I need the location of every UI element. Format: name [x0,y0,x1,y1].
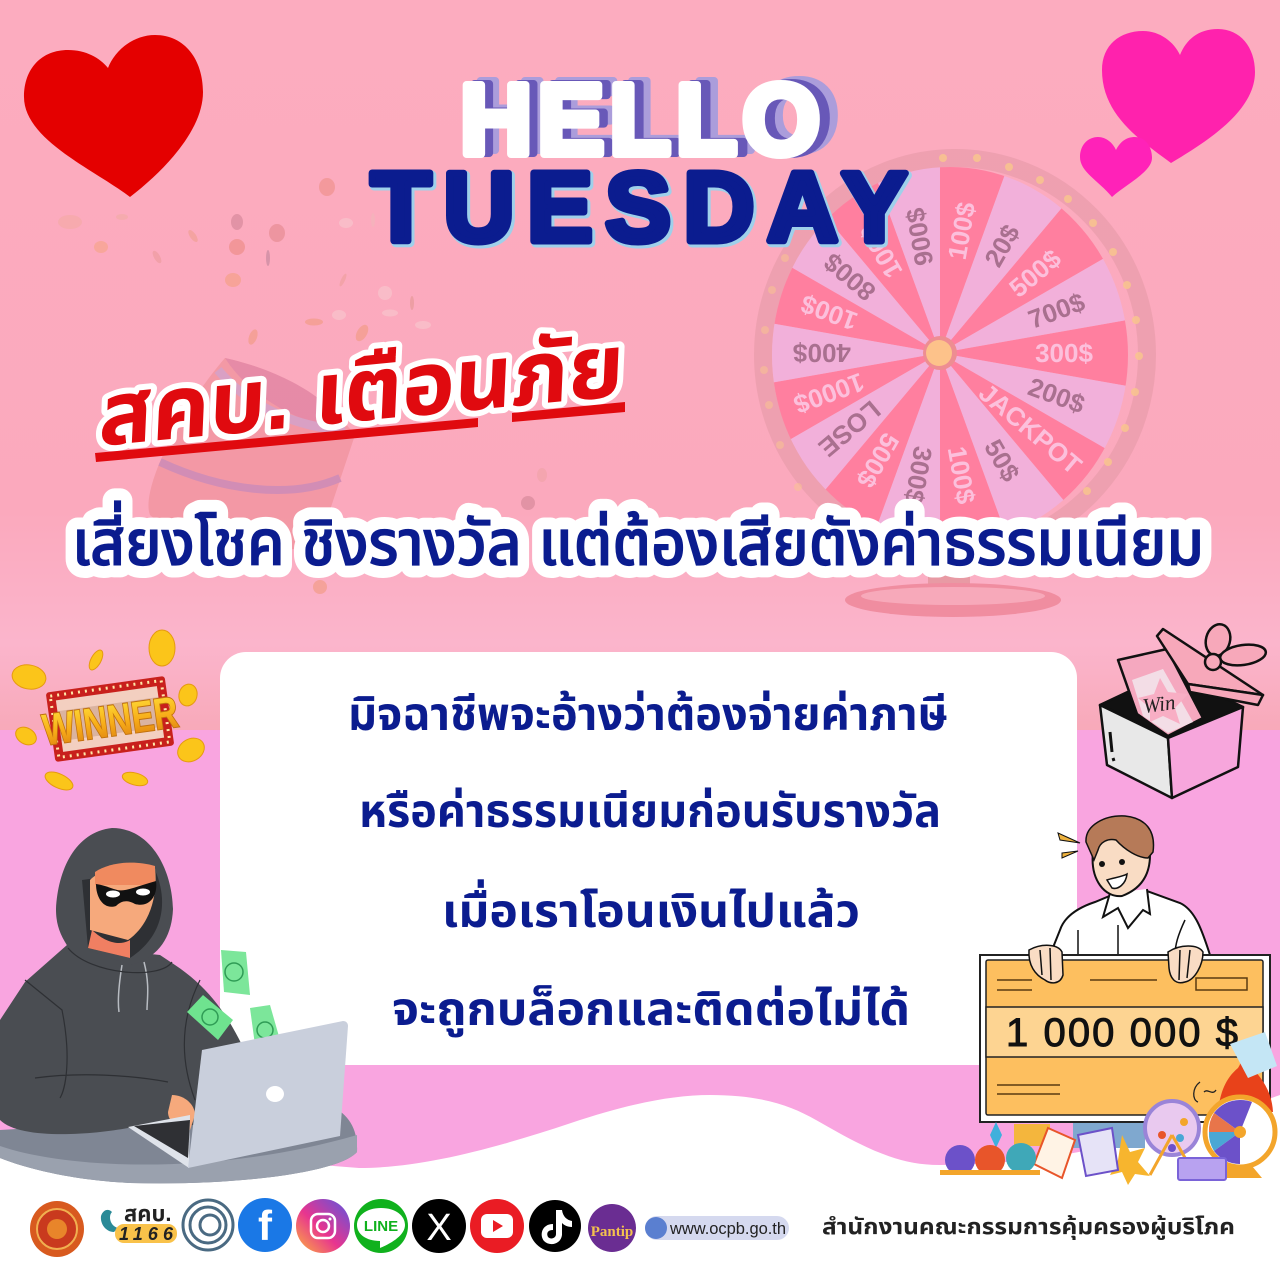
icon: gift box with phone [1100,621,1267,798]
head [1093,835,1150,896]
title: HELLO: HELLO [474,60,838,172]
bingo balls [945,1145,975,1175]
eyes [1099,861,1105,867]
icon: LINE [354,1199,408,1253]
wheel segments: 50$ [978,434,1026,487]
footer: social icons row [30,1198,789,1257]
wheel segments: 100$ [942,199,981,262]
bow [1202,621,1267,670]
icon: TikTok [529,1200,581,1252]
subheading: เสี่ยงโชค ชิงรางวัล แต่ต้องเสียตังค่าธรรมเนียม [72,500,1204,579]
icon: Facebook: f [258,1202,273,1249]
heading underline [95,402,625,462]
ticket red [1034,1128,1075,1178]
title: HELLO: HELLO [460,64,820,176]
title: TUESDAY: TUESDAY [371,152,907,262]
icon: small magenta heart [1080,137,1152,197]
wheel segments: 400$ [793,338,851,368]
lottery cage [1145,1101,1199,1175]
wheel segments: 300$ [1035,338,1093,368]
sign frame [38,675,182,763]
wheel segments: 300$ [899,444,938,507]
face [90,866,156,940]
hoodie fold lines [25,948,200,1100]
phone [1118,649,1203,736]
title: TUESDAY: TUESDAY [373,154,909,264]
smile [1107,874,1127,888]
logo: hotline 1166 [101,1201,177,1244]
burst [1110,1135,1150,1185]
falling money 2 [250,1005,280,1045]
hood [56,828,173,965]
sign frame: WINNER [40,688,181,755]
icon: YouTube [470,1199,524,1253]
cheque [980,955,1270,1122]
money bag [1218,1052,1273,1112]
coin stack [1014,1124,1050,1146]
logo: hotline 1166: 1166 [119,1224,174,1244]
illustration: lottery items [940,1032,1277,1185]
man legs [1073,1120,1145,1148]
text: line 2: หรือค่าธรรมเนียมก่อนรับรางวัล [359,785,941,837]
icon: Instagram [296,1199,350,1253]
icon: Pantip [588,1204,636,1252]
background: white wave footer area [0,1095,1280,1280]
hand [168,1095,195,1130]
text: line 1: มิจฉาชีพจะอ้างว่าต้องจ่ายค่าภาษี [348,688,948,740]
background coins [58,178,547,594]
neck shading [88,930,130,958]
hair [82,870,162,958]
box right face [1168,707,1243,798]
logo: hotline 1166: สคบ. [124,1201,172,1226]
background: prize wheel [710,121,1170,617]
icon: X [412,1199,466,1253]
background: orchid lower zone [0,730,1280,1170]
laptop screen [188,1021,348,1168]
gold coins [10,630,209,794]
wheel segments: 500$ [850,428,905,493]
icon: gift box with phone: Win [1141,690,1177,718]
wheel segments [772,167,1128,524]
text: line 3: เมื่อเราโอนเงินไปแล้ว [442,879,860,937]
wheel segments: JACKPOT [973,377,1088,480]
heading: OCPB warns: สคบ. เตือนภัย [97,315,626,465]
background: pink upper zone [0,0,1280,732]
website pill [645,1216,789,1240]
box left face [1100,705,1172,798]
purple banknote [1178,1158,1226,1180]
wheel rim [763,158,1147,552]
icon: winner sign with coins [10,630,209,794]
cheque signature [1194,1082,1216,1102]
wheel segments: 800$ [817,247,881,307]
falling money 1 [221,950,250,995]
sparkle [990,1122,1002,1148]
laptop keyboard base [128,1115,190,1168]
exclamation mark [1110,732,1114,761]
drawstrings [118,962,148,1012]
wheel segments: 100$ [796,288,861,337]
cheque lines [997,980,1157,1094]
wheel segments: LOSE [813,395,886,463]
hoodie body [0,945,242,1134]
icon: LINE: LINE [364,1218,398,1235]
title: HELLO: HELLO [468,63,830,175]
icon: X: X [426,1207,452,1249]
laptop logo [266,1086,284,1102]
footer: agency name: สำนักงานคณะกรรมการคุ้มครองผู้บริโภค [822,1214,1235,1240]
ticket purple [1078,1128,1118,1176]
hair [1086,816,1153,860]
illustration: hacker with laptop [0,828,357,1183]
lid top [1157,629,1263,695]
panel: warning message [220,652,1077,1065]
background: wooden barrel [148,358,355,553]
wheel segments: 900$ [900,205,939,268]
table [0,1105,357,1183]
icon: Pantip: Pantip [591,1224,633,1240]
wheel segments: 100$ [853,218,908,283]
money on sleeve [187,995,233,1040]
rim lights [760,154,1143,495]
lid band [1188,684,1263,705]
prize mini wheel [1205,1097,1275,1178]
wheel segments: 1000$ [790,367,868,420]
wheel segments: 20$ [978,219,1026,272]
wheel segments: 200$ [1024,371,1089,420]
icon: red heart [24,35,203,197]
icon: Facebook [238,1198,292,1252]
hands on cheque [1029,945,1203,983]
box inside [1100,672,1243,738]
logo: agency emblem [30,1201,84,1257]
wheel segments: 700$ [1024,286,1089,335]
logo: OCPB [183,1200,233,1250]
text: line 4: จะถูกบล็อกและติดต่อไม่ได้ [392,983,910,1037]
wheel stand [845,565,1061,617]
shirt [1050,891,1210,955]
illustration: happy man with giant cheque [980,816,1270,1148]
subheading: เสี่ยงโชค ชิงรางวัล แต่ต้องเสียตังค่าธรรมเนียม [72,500,1204,579]
website pill: www.ocpb.go.th [669,1220,786,1238]
mask [96,881,156,907]
cheque amount: 1 000 000 $ [1006,1011,1238,1055]
wheel segments: 100$ [942,444,981,507]
wheel segments: 500$ [1003,243,1067,303]
surprise marks [1058,833,1080,858]
icon: large magenta heart [1102,29,1255,163]
blue ticket [1230,1032,1277,1078]
wheel hub [923,336,957,370]
